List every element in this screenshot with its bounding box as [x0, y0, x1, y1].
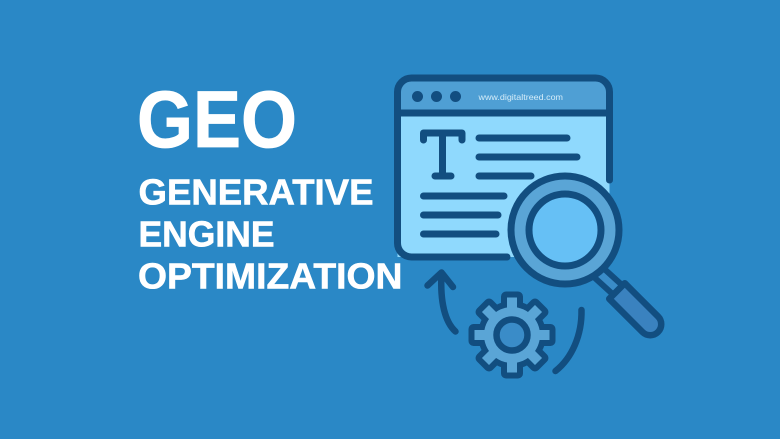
- magnifier ring: [511, 176, 619, 284]
- browser title bar: [398, 78, 610, 113]
- icon: gear: [450, 273, 574, 397]
- magnifier neck: [598, 272, 620, 292]
- subtitle: Generative Engine Optimization: OPTIMIZATION: [138, 256, 402, 296]
- icon: letter T: [424, 133, 462, 176]
- magnifier handle: [609, 283, 666, 340]
- icon: magnifying glass: [511, 176, 666, 340]
- arrow: cycle arc right: [556, 310, 582, 371]
- gear hub: [496, 320, 528, 350]
- browser window illustration: [398, 78, 610, 257]
- browser page background: [398, 113, 610, 257]
- arrow: cycle arrow up: [428, 272, 456, 332]
- text lines: [424, 138, 577, 234]
- window control dots: [412, 91, 461, 102]
- subtitle: Generative Engine Optimization: ENGINE: [138, 214, 274, 254]
- subtitle: Generative Engine Optimization: [138, 172, 402, 296]
- url text: www.digitaltreed.com: [477, 92, 563, 102]
- browser outline: [398, 78, 610, 257]
- magnifier lens: [529, 194, 601, 266]
- subtitle: Generative Engine Optimization: GENERATIVE: [138, 172, 374, 212]
- title: GEO: GEO: [137, 75, 297, 165]
